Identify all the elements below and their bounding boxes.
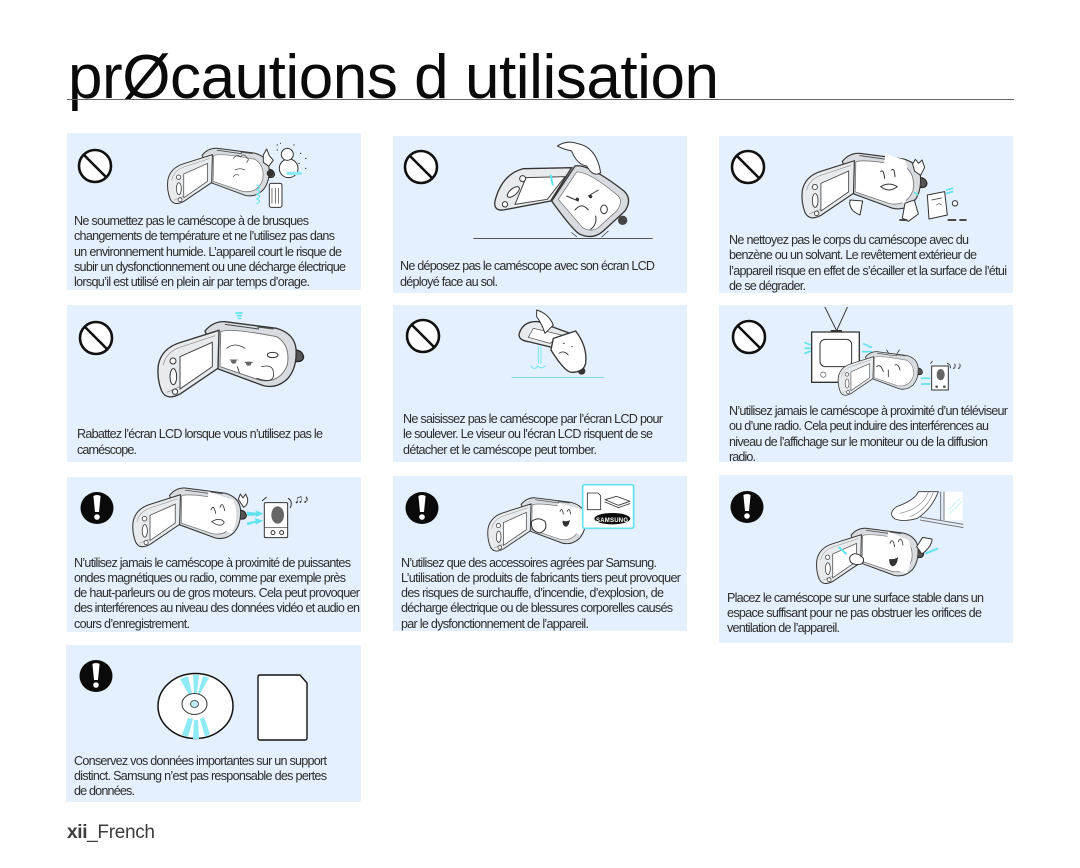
text block: distinct. Samsung n’est pas responsable des pertes: [74, 769, 327, 783]
text block: [74, 754, 328, 798]
illustration: camcorder near window and curtain: [817, 492, 963, 584]
icon: prohibition: [79, 150, 111, 182]
text block: un environnement humide. L’appareil court le risque de: [74, 245, 342, 259]
text block: lorsqu’il est utilisé en plein air par temps d’orage.: [74, 275, 310, 289]
text block: [74, 556, 360, 631]
text block: L’utilisation de produits de fabricants tiers peut provoquer: [401, 571, 681, 585]
icon: music notes: ♫♪: [294, 492, 309, 506]
panel: back up data: [66, 645, 361, 802]
illustration: camcorder with solvent bottles: [802, 153, 966, 221]
text block: espace suffisant pour ne pas obstruer les orifices de: [727, 606, 982, 620]
text block: de haut-parleurs ou de gros moteurs. Cela peut provoquer: [74, 586, 360, 600]
text block: [74, 214, 346, 289]
icon: warning: [80, 492, 114, 524]
text block: décharge électrique ou de blessures corporelles causés: [401, 601, 673, 615]
footer: page number: xii_French: [67, 822, 155, 843]
text block: déployé face au sol.: [400, 275, 498, 289]
icon: warning: [730, 491, 764, 523]
text block: N’utilisez jamais le caméscope à proximité d’un téléviseur: [729, 404, 1008, 418]
illustration: camcorder lifted by screen: [512, 310, 604, 378]
text block: Ne saisissez pas le caméscope par l’écran LCD pour: [403, 412, 663, 426]
text block: [400, 259, 655, 289]
panel: away from magnetic waves: [67, 477, 361, 632]
text block: ventilation de l’appareil.: [727, 621, 840, 635]
icon: prohibition: [407, 320, 439, 352]
icon: memory card: [258, 675, 307, 740]
text block: Conservez vos données importantes sur un support: [74, 754, 328, 768]
icon: music notes: ♪♪: [952, 361, 962, 372]
text block: par le dysfonctionnement de l’appareil.: [401, 617, 589, 631]
text block: subir un dysfonctionnement ou une décharge électrique: [74, 260, 346, 274]
text block: le soulever. Le viseur ou l’écran LCD risquent de se: [403, 427, 653, 441]
icon: prohibition: [733, 321, 765, 353]
illustration: TV, camcorder and radio: [805, 307, 962, 395]
text block: N’utilisez jamais le caméscope à proximité de puissantes: [74, 556, 351, 570]
text block: [77, 427, 323, 457]
illustration: camcorder with Samsung accessories: [488, 485, 634, 551]
illustration: sleepy camcorder: [158, 313, 304, 397]
title: prØcautions d utilisation: [68, 43, 719, 112]
icon: prohibition: [405, 151, 437, 183]
text block: caméscope.: [77, 443, 137, 457]
icon: prohibition: [80, 322, 112, 354]
text block: des interférences au niveau des données vidéo et audio en: [74, 601, 360, 615]
text block: radio.: [729, 450, 756, 464]
illustration: camcorder face down on floor: [473, 142, 653, 239]
text block: [727, 591, 984, 635]
text block: [729, 233, 1007, 293]
text block: [729, 404, 1008, 464]
illustration: camcorder near speaker: [133, 488, 309, 547]
illustration: camcorder in cold and humid air: [168, 143, 306, 207]
icon: warning: [80, 660, 112, 692]
text block: Rabattez l’écran LCD lorsque vous n’utilisez pas le: [77, 427, 323, 441]
panel: ventilation: [719, 475, 1013, 643]
panel: away from TV and radio: [719, 305, 1013, 464]
text block: benzène ou un solvant. Le revêtement extérieur de: [729, 248, 977, 262]
text block: changements de température et ne l’utilisez pas dans: [74, 229, 335, 243]
text block: N’utilisez que des accessoires agrées par Samsung.: [401, 556, 657, 570]
text block: [401, 556, 681, 631]
text block: [403, 412, 663, 457]
text block: détacher et le caméscope peut tomber.: [403, 443, 597, 457]
text block: ondes magnétiques ou radio, comme par exemple près: [74, 571, 346, 585]
panel: do not place face down: [393, 136, 687, 293]
panel: do not clean with solvents: [719, 136, 1013, 293]
text block: de données.: [74, 784, 135, 798]
icon: prohibition: [732, 151, 764, 183]
panel: do not lift by LCD: [393, 305, 687, 462]
text block: Ne soumettez pas le caméscope à de brusques: [74, 214, 309, 228]
text block: Placez le caméscope sur une surface stable dans un: [727, 591, 984, 605]
text block: des risques de surchauffe, d’incendie, d’explosion, de: [401, 586, 664, 600]
logo: Samsung: SAMSUNG: [596, 518, 628, 524]
text block: ou d’une radio. Cela peut induire des interférences au: [729, 419, 989, 433]
text block: cours d’enregistrement.: [74, 617, 190, 631]
panel: sudden temperature changes: [67, 133, 361, 290]
text block: l’appareil risque en effet de s’écailler et la surface de l’étui: [729, 264, 1007, 278]
text block: Ne déposez pas le caméscope avec son écran LCD: [400, 259, 655, 273]
text block: de se dégrader.: [729, 279, 806, 293]
panel: close LCD when not in use: [67, 305, 361, 462]
icon: warning: [406, 492, 438, 524]
panel: approved accessories: [393, 476, 687, 631]
icon: disc: [158, 674, 233, 739]
text block: Ne nettoyez pas le corps du caméscope avec du: [729, 233, 969, 247]
text block: niveau de l’affichage sur le moniteur ou de la diffusion: [729, 435, 988, 449]
